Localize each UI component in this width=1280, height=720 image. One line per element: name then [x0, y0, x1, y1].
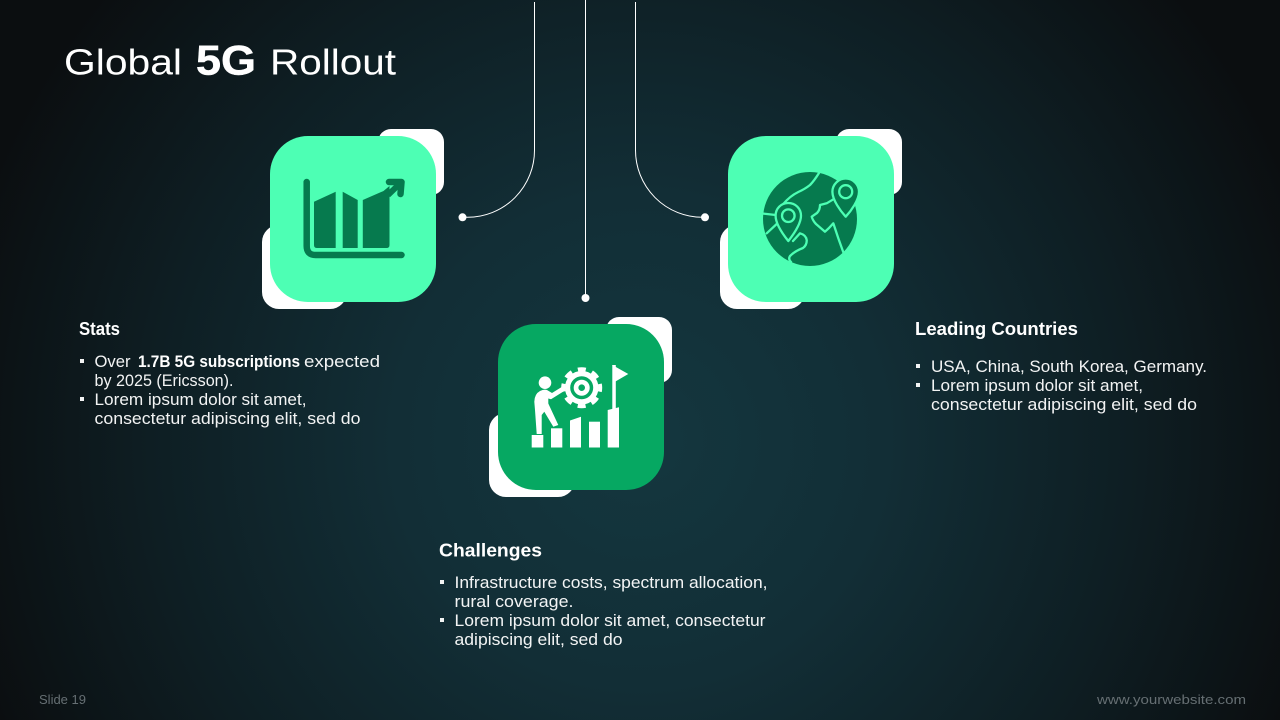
text block: stats: expected: [304, 353, 380, 371]
panel: challenges icon card: [489, 317, 672, 497]
text block: stats: Lorem ipsum dolor sit amet,: [94, 391, 306, 409]
text block: challenges: adipiscing elit, sed do: [454, 631, 622, 649]
text block: challenges: [439, 540, 768, 649]
icon: bar chart with rising arrow: [307, 182, 402, 255]
heading: stats: Stats: [79, 318, 120, 339]
text block: stats: consectetur adipiscing elit, sed do: [94, 410, 360, 428]
heading: challenges: Challenges: [439, 540, 542, 560]
panel: leading countries icon card: [720, 129, 902, 309]
connector lines: [458, 0, 709, 302]
text block: challenges: Infrastructure costs, spectrum allocation,: [454, 574, 768, 592]
title: 5G: [196, 36, 256, 84]
text block: leading countries: Lorem ipsum dolor sit amet,: [931, 377, 1143, 395]
title: [64, 36, 396, 84]
text block: stats: Over: [94, 353, 131, 371]
panel: stats icon card: [262, 129, 444, 309]
text block: stats: 1.7B 5G subscriptions: [138, 353, 300, 371]
text block: leading countries: USA, China, South Korea, Germany.: [931, 358, 1207, 376]
text block: stats: by 2025 (Ericsson).: [94, 372, 234, 390]
footer: website: www.yourwebsite.com: [1096, 692, 1246, 707]
text block: stats: [79, 318, 380, 428]
title: Global: [64, 42, 182, 82]
footer: slide number: Slide 19: [39, 692, 86, 707]
text block: challenges: Lorem ipsum dolor sit amet, consectetur: [454, 612, 766, 630]
text block: challenges: rural coverage.: [454, 593, 574, 611]
icon: globe with location pins: [762, 172, 859, 266]
heading: leading countries: Leading Countries: [915, 318, 1078, 339]
title: Rollout: [270, 42, 396, 82]
text block: leading countries: consectetur adipiscing elit, sed do: [931, 396, 1197, 414]
text block: leading countries: [915, 318, 1207, 414]
icon: climber, gear, steps and flag: [532, 365, 628, 448]
